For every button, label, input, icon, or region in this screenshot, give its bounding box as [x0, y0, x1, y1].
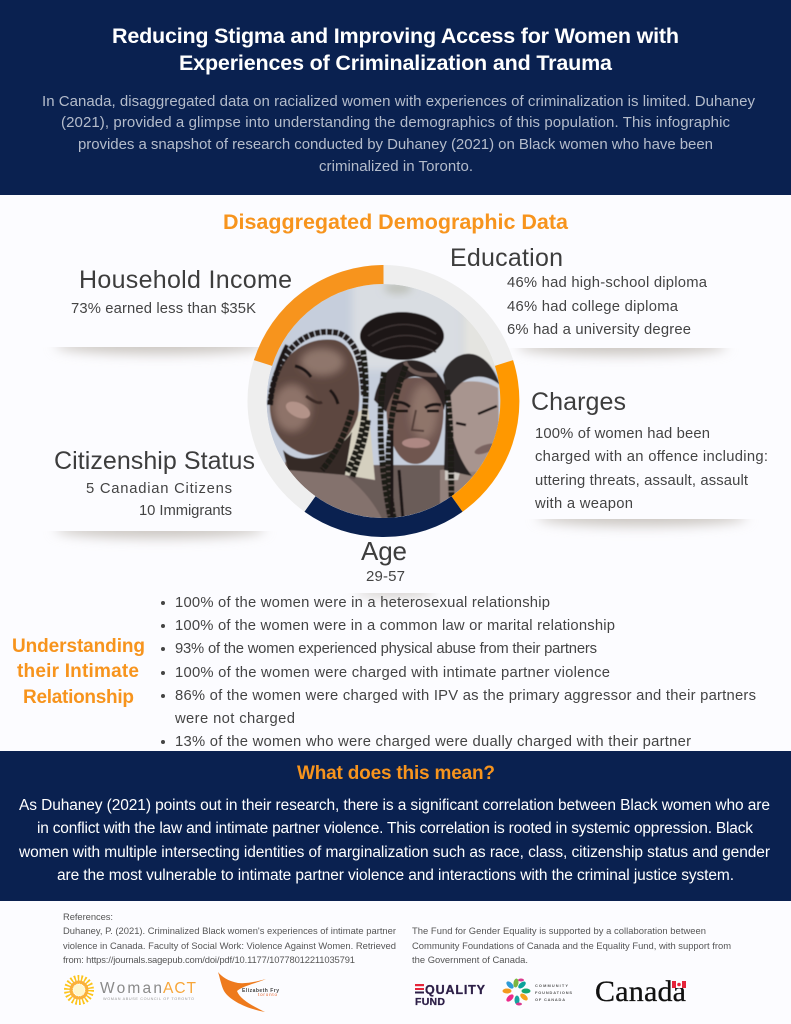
bullet list: 13% of the women who were charged were dually charged with their partner	[175, 734, 691, 750]
panel: charges: charged with an offence including:	[535, 449, 768, 465]
panel: education: 46% had high-school diploma	[507, 275, 708, 291]
funding note: The Fund for Gender Equality is supported by a collaboration between	[412, 925, 706, 936]
logo: WomanACT: Woman	[100, 980, 162, 997]
panel: education: Education	[450, 244, 563, 272]
logo: Equality Fund	[415, 983, 486, 1008]
body text: are the most vulnerable to intimate partner violence and interactions with the criminal justice system.	[57, 867, 734, 884]
bullet list: 100% of the women were charged with intimate partner violence	[175, 665, 610, 681]
references: violence in Canada. Faculty of Social Work: Violence Against Women. Retrieved	[63, 940, 396, 951]
panel: what does this mean	[0, 751, 791, 901]
logo: Elizabeth Fry: toronto	[258, 992, 277, 997]
ring: charges segment	[457, 363, 510, 504]
intro text	[42, 93, 756, 175]
logo: WomanACT: ACT	[163, 980, 197, 997]
right woman	[447, 381, 500, 472]
photo of three women	[266, 284, 500, 518]
title: Experiences of Criminalization and Trauma	[179, 51, 613, 75]
left woman	[270, 339, 359, 455]
bullet list: 100% of the women were in a heterosexual relationship	[175, 595, 550, 611]
panel: household income: Household Income	[79, 266, 292, 294]
panel: charges: 100% of women had been	[535, 426, 710, 442]
heading: intimate relationship	[12, 636, 145, 708]
bullet list: were not charged	[174, 711, 295, 727]
light gaps between braids	[344, 408, 376, 481]
funding note	[412, 925, 731, 965]
logo: Canada wordmark: Canada	[595, 975, 686, 1008]
bullet list: 93% of the women experienced physical abuse from their partners	[175, 641, 597, 657]
ring: income segment	[263, 274, 384, 363]
references: Duhaney, P. (2021). Criminalized Black women's experiences of intimate partner	[63, 925, 396, 936]
center woman	[387, 378, 444, 464]
panel: citizenship status: Citizenship Status	[54, 447, 255, 475]
heading: demographic data: Disaggregated Demographic Data	[223, 210, 569, 234]
center woman features	[392, 402, 441, 408]
logo: Community Foundations of Canada: OF CANADA	[535, 997, 565, 1002]
body text: As Duhaney (2021) points out in their research, there is a significant correlation between Black women who are	[19, 797, 770, 814]
intro text: (2021), provided a glimpse into understanding the demographics of this population. This infographic	[61, 114, 730, 131]
panel: age: Age	[361, 536, 407, 566]
ring: grey base	[257, 274, 510, 528]
logo: Community Foundations of Canada: COMMUNITY	[535, 983, 568, 988]
intro text: In Canada, disaggregated data on racialized women with experiences of criminalization is limited. Duhaney	[42, 93, 756, 110]
references	[63, 911, 396, 965]
panel: header	[0, 0, 791, 195]
intro text: criminalized in Toronto.	[319, 158, 473, 175]
title	[112, 24, 679, 75]
panel: education	[450, 244, 708, 338]
heading: intimate relationship: Understanding	[12, 636, 145, 657]
logo: WomanACT: WOMAN ABUSE COUNCIL OF TORONTO	[103, 997, 194, 1001]
bullet list: 100% of the women were in a common law or marital relationship	[175, 618, 615, 634]
logo: Community Foundations of Canada	[502, 978, 572, 1006]
funding note: the Government of Canada.	[412, 954, 528, 965]
references: References:	[63, 911, 113, 922]
body text: in conflict with the law and intimate partner violence. This correlation is rooted in systemic oppression. Black	[37, 820, 753, 837]
panel: household income: 73% earned less than $35K	[71, 301, 256, 317]
panel: citizenship status	[54, 447, 255, 519]
ring: age segment	[310, 504, 457, 528]
logo: Community Foundations of Canada: FOUNDATIONS	[535, 990, 572, 995]
panel: charges	[531, 388, 768, 512]
heading: What does this mean?	[297, 763, 495, 784]
panel: citizenship status: 5 Canadian Citizens	[86, 481, 232, 497]
body text	[18, 797, 770, 884]
logo: Elizabeth Fry: Elizabeth Fry	[242, 988, 279, 994]
bullet list	[161, 595, 756, 750]
bottom tones	[344, 464, 445, 518]
left woman features	[295, 366, 338, 404]
panel: citizenship status: 10 Immigrants	[139, 503, 232, 519]
panel: household income	[71, 266, 292, 317]
heading: intimate relationship: their Intimate	[17, 661, 139, 682]
panel: education: 6% had a university degree	[507, 322, 691, 338]
panel: age	[361, 536, 407, 585]
bullet list: 86% of the women were charged with IPV as the primary aggressor and their partners	[175, 688, 756, 704]
logo: Equality Fund: FUND	[415, 996, 445, 1008]
donut ring with photo	[257, 274, 512, 530]
hair bun	[360, 312, 444, 360]
braids	[380, 366, 452, 525]
panel: charges: with a weapon	[534, 496, 633, 512]
panel: education: 46% had college diploma	[507, 299, 679, 315]
panel: age: 29-57	[366, 568, 405, 585]
funding note: Community Foundations of Canada and the Equality Fund, with support from	[412, 940, 731, 951]
heading: intimate relationship: Relationship	[23, 687, 134, 708]
body text: women with multiple intersecting identities of marginalization such as race, class, citizenship status and gender	[18, 844, 770, 861]
logo: WomanACT	[68, 980, 197, 1001]
intro text: provides a snapshot of research conducted by Duhaney (2021) on Black women who have been	[78, 136, 713, 153]
panel: charges: uttering threats, assault, assault	[535, 473, 748, 489]
references: from: https://journals.sagepub.com/doi/pdf/10.1177/10778012211035791	[63, 954, 355, 965]
panel shadows	[55, 336, 747, 596]
panel: charges: Charges	[531, 388, 626, 416]
title: Reducing Stigma and Improving Access for Women with	[112, 24, 679, 48]
logo: Elizabeth Fry	[218, 972, 279, 1012]
logo: Equality Fund: QUALITY	[425, 983, 486, 997]
